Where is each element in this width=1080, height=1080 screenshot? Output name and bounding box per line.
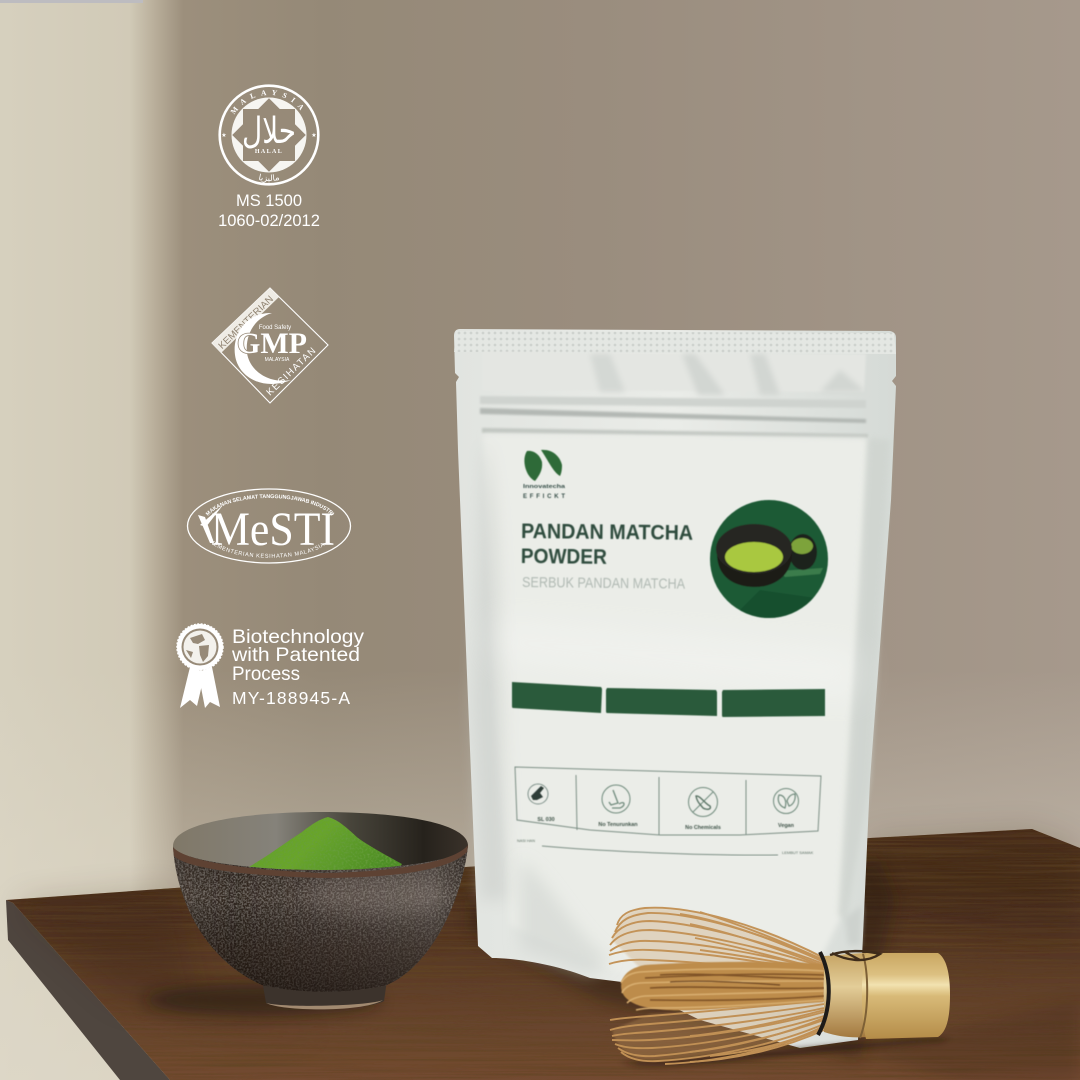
patent text: Biotechnology bbox=[232, 626, 364, 648]
bowl highlight bbox=[305, 873, 445, 917]
brand logo bbox=[523, 450, 566, 500]
GMP logo: KEMENTERIAN bbox=[216, 294, 276, 352]
bottom print line: LEMBUT SAMAK bbox=[782, 850, 814, 855]
front panel bbox=[483, 434, 868, 985]
product title bbox=[521, 520, 693, 570]
panel shadows bbox=[472, 438, 890, 975]
icon: no chemicals bbox=[685, 788, 721, 831]
three green bars bbox=[512, 682, 825, 717]
halal certificate number bbox=[218, 192, 320, 230]
halal certificate number: MS 1500 bbox=[236, 192, 302, 210]
halal logo: HALAL bbox=[255, 149, 283, 155]
product title: POWDER bbox=[521, 545, 607, 569]
patent text bbox=[231, 626, 364, 708]
GMP logo: MALAYSIA bbox=[265, 357, 290, 363]
halal logo: ماليزيا bbox=[259, 174, 279, 183]
MeSTI logo: KEMENTERIAN KESIHATAN MALAYSIA bbox=[212, 540, 324, 558]
bowl shadow bbox=[144, 984, 380, 1016]
bamboo whisk bbox=[609, 908, 950, 1066]
top seal band bbox=[454, 331, 896, 354]
patent text: with Patented bbox=[231, 644, 360, 666]
whisk neck bbox=[824, 953, 868, 1037]
inner tine lines bbox=[621, 969, 824, 1010]
bottom print line: NASI HAN bbox=[517, 839, 535, 843]
halal logo: حلال bbox=[242, 111, 296, 152]
outer upper tines bbox=[609, 908, 824, 976]
GMP logo bbox=[212, 288, 328, 403]
patent text: MY-188945-A bbox=[232, 688, 350, 708]
patent text: Process bbox=[232, 663, 300, 685]
top creases and zip bbox=[480, 352, 868, 438]
product title: PANDAN MATCHA bbox=[521, 520, 693, 545]
GMP logo: Food Safety bbox=[259, 325, 291, 331]
black thread bbox=[818, 952, 829, 1035]
GMP logo: GMP bbox=[237, 327, 307, 360]
icon: SL 030: SL 030 bbox=[537, 817, 555, 823]
handle ring bbox=[860, 954, 867, 1038]
product subtitle: SERBUK PANDAN MATCHA bbox=[522, 575, 686, 593]
icon: no chemicals: No Chemicals bbox=[685, 825, 721, 831]
icon: no sweetener bbox=[598, 785, 638, 828]
top cord knot bbox=[830, 951, 880, 960]
matcha powder bbox=[249, 817, 402, 870]
patent ribbon badge bbox=[177, 624, 223, 708]
certification logos bbox=[176, 84, 364, 708]
feature icon table bbox=[515, 767, 821, 835]
product image circle bbox=[710, 500, 830, 630]
bowl interior bbox=[173, 812, 468, 870]
GMP logo: KESIHATAN bbox=[264, 345, 319, 398]
bowl foot bbox=[262, 980, 387, 1009]
inner tine cluster bbox=[621, 962, 824, 1010]
halal logo: ★ bbox=[311, 132, 317, 139]
MeSTI logo: MAKANAN SELAMAT TANGGUNGJAWAB INDUSTRI bbox=[206, 494, 334, 516]
halal logo: ★ bbox=[221, 132, 227, 139]
matcha bowl bbox=[144, 812, 468, 1016]
icon: no sweetener: No Tenurunkan bbox=[598, 822, 638, 828]
MeSTI logo: MeSTI bbox=[211, 503, 335, 556]
bowl body bbox=[173, 846, 468, 992]
brand logo: EFFICKT bbox=[523, 494, 565, 500]
tine body tint bbox=[612, 908, 824, 1061]
icon: SL 030 bbox=[528, 784, 555, 823]
pouch body bbox=[454, 329, 896, 1048]
whisk handle bbox=[862, 953, 950, 1039]
brand logo: Innovatecha bbox=[523, 484, 566, 490]
wooden table bbox=[6, 829, 1080, 1080]
halal certificate number: 1060-02/2012 bbox=[218, 212, 320, 230]
icon: vegan: Vegan bbox=[778, 823, 794, 829]
outer lower tines bbox=[610, 1000, 824, 1064]
icon: vegan bbox=[774, 788, 798, 829]
whisk shadow bbox=[620, 1038, 950, 1066]
MeSTI logo bbox=[186, 488, 352, 564]
pouch shadow on table bbox=[470, 860, 895, 1060]
halal logo: MALAYSIA bbox=[230, 90, 304, 114]
product pouch bbox=[454, 329, 896, 1048]
halal logo bbox=[218, 84, 320, 186]
bottom print line bbox=[517, 839, 814, 855]
